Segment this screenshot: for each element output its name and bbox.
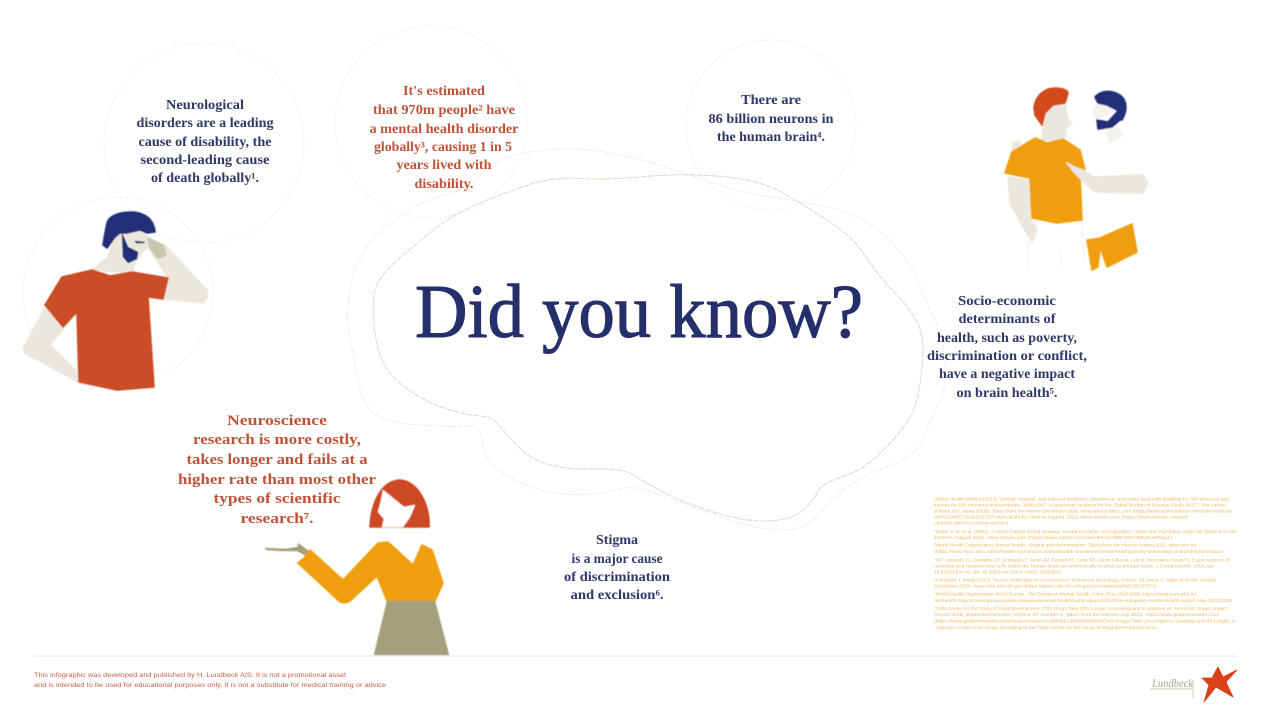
- outer brain contour: [347, 149, 946, 530]
- text: socio-economic determinants: health, such as poverty,: [937, 330, 1077, 345]
- references: ³World Health Organization. Mental health - Stigma and discrimination. Taken from the internet August 2021. www.who.int: [934, 542, 1197, 548]
- references: ⁷Tufts Center for the Study of Drug Development. CNS Drugs Take 20% Longer to Develop and to Approve vs. Non-CNS Drugs: Impact: [934, 606, 1228, 612]
- text: neuroscience research: [178, 413, 376, 527]
- references: ⁴W7. Azevedo FA, Carvalho LR, Grinberg LT, Farfel JM, Ferretti RE, Leite RE, Jacob Filho W, Lent R, Herculano-Houzel S. Equal numbers of: [934, 558, 1230, 564]
- text: neurological disorders: second-leading cause: [140, 152, 270, 167]
- text: stigma: [564, 532, 671, 602]
- woman face: [378, 490, 415, 527]
- footer rule: [34, 656, 1237, 657]
- woman skirt: [374, 601, 449, 655]
- references: ⁶World Health Organization. WHO Europe. The European Mental Health Action Plan 2013-2020. https://www.euro.who.int: [934, 592, 1197, 598]
- references: Report 2018, September/October, Volume 20, number 5. Taken from the internet July 2022. https://www.globenewswire.com: [934, 612, 1219, 618]
- text: neuroscience research: types of scientific: [214, 491, 341, 507]
- references: cles/s41380-021-01094-w#Sec1: [934, 520, 1009, 526]
- text: stigma: and exclusion⁶.: [570, 587, 664, 602]
- references: -Approve-vs-Non-CNS-Drugs-According-to-the-Tufts-Center-for-the-Study-of-Drug-Development.html): [934, 625, 1156, 631]
- shorts: [1087, 224, 1137, 270]
- second man beard: [1097, 112, 1120, 129]
- text: socio-economic determinants: discrimination or conflict,: [927, 348, 1087, 363]
- references: /pii/S0140673618322797?via%3Dihub) Internet August 2021. www.nature.com (https://www.nature.com/arti: [934, 514, 1188, 520]
- text: mental health: disability.: [414, 176, 474, 191]
- first man shirt: [1005, 138, 1085, 223]
- logo star: [1202, 667, 1237, 702]
- text: socio-economic determinants: determinants of: [958, 311, 1056, 326]
- references: 10;513(5):532-41. doi: 10.1002/cne.21974. PMID: 19226510.: [934, 570, 1062, 576]
- text: stigma: Stigma: [596, 532, 638, 547]
- text: mental health: It's estimated: [403, 83, 486, 98]
- text: socio-economic determinants: [927, 293, 1087, 400]
- text: stigma: is a major cause: [572, 551, 662, 566]
- second man face: [1093, 103, 1122, 142]
- references: (https://www.globenewswire.com/news-release/2018/09/11/1569554/0/en/CNS-Drugs-Take-20-Longer-to-Develop-and-38-Longer-to: [934, 618, 1236, 624]
- text: mental health: a mental health disorder: [370, 121, 519, 136]
- text: neurons: There are: [741, 92, 801, 107]
- text: neurological disorders: Neurological: [166, 97, 244, 112]
- references: (https://www.euro.who.int/en/health-topics/noncommunicable-diseases/mental-health/priority-areas/stigma-and-discrimination): [934, 549, 1223, 555]
- text: neurological disorders: [136, 97, 274, 185]
- text: stigma: of discrimination: [564, 569, 671, 584]
- text: socio-economic determinants: on brain health⁵.: [956, 385, 1058, 400]
- second man arm: [1067, 163, 1148, 193]
- text: neurons: [708, 92, 834, 144]
- text: mental health: that 970m people² have: [373, 102, 515, 117]
- woman hand: [265, 543, 311, 556]
- text: mental health: years lived with: [396, 157, 492, 172]
- text: neuroscience research: research is more costly,: [193, 432, 361, 448]
- logo underline: [1150, 680, 1193, 698]
- references: /en/health-topics/noncommunicable-diseases/mental-health/publications/2013/the-european-mental-health-action-plan-20132020: [934, 598, 1232, 604]
- text: mental health: [370, 83, 519, 191]
- disclaimer: This infographic was developed and published by H. Lundbeck A/S. It is not a promotional asset: [34, 672, 346, 679]
- references: Global Health Metrics (2019) "Global, regional, and national incidence, prevalence, and years lived with disability for 354 diseases and: [934, 496, 1229, 502]
- figure: two men: [1005, 88, 1148, 270]
- text: neuroscience research: Neuroscience: [227, 413, 327, 429]
- references: Volume 392, Issue 10159. Taken from the internet December 2020. www.sciencedirect.com (https://www.sciencedirect.com/science/article: [934, 508, 1232, 514]
- references: December 2020. www.ncbi.nlm.nih.gov (https://www.ncbi.nlm.nih.gov/pmc/articles/PMC3812767/): [934, 584, 1156, 590]
- text: neurological disorders: cause of disability, the: [138, 134, 272, 149]
- text: neuroscience research: takes longer and fails at a: [186, 452, 368, 468]
- text: neurons: 86 billion neurons in: [708, 111, 834, 126]
- logo wordmark: Lundbeck: [1151, 678, 1194, 690]
- man shirt: [45, 270, 168, 390]
- disclaimer: [34, 672, 386, 689]
- references: [934, 496, 1237, 631]
- text: socio-economic determinants: have a negative impact: [939, 366, 1076, 381]
- woman hair: [370, 480, 429, 527]
- background circles: [23, 26, 856, 387]
- text: neurons: the human brain⁴.: [717, 129, 825, 144]
- references: internet, August 2021. www.nature.com (https://www.nature.com/articles/s41380-020-00918-w#Sec1): [934, 535, 1172, 541]
- trousers outline: [1028, 222, 1084, 268]
- figure: man with hand on face: [23, 212, 207, 390]
- woman sweater: [298, 542, 443, 603]
- disclaimer: and is intended to be used for educational purposes only. It is not a substitute for medical training or advice: [34, 682, 386, 689]
- man beard and eye: [122, 233, 145, 263]
- man hand: [148, 238, 166, 258]
- second man hair: [1095, 91, 1126, 120]
- first man hair: [1034, 88, 1068, 125]
- text: neuroscience research: higher rate than most other: [178, 472, 376, 488]
- first man skin: face, neck and arm: [1008, 103, 1072, 242]
- references: injuries for 195 countries and territories, 1990-2017: a systematic analysis for the Global Burden of Disease Study 2017." The Lancet,: [934, 502, 1227, 508]
- text: socio-economic determinants: Socio-economic: [958, 293, 1056, 308]
- brain outline: [347, 149, 946, 530]
- references: ²Smith, E.N. et al. (2021). "A Brain Capital Grand Strategy: toward economic reimagination." Molecular Psychiatry, Issue 26. Taken from the: [934, 529, 1237, 535]
- man skin: arms, neck and face: [23, 230, 207, 387]
- text: neuroscience research: research⁷.: [240, 511, 314, 527]
- title: Did you know?: [415, 270, 863, 354]
- text: mental health: globally³, causing 1 in 5: [374, 139, 512, 154]
- text: neurological disorders: disorders are a leading: [136, 115, 274, 130]
- logo: Lundbeck: [1150, 667, 1237, 702]
- references: neuronal and nonneuronal cells make the human brain an isometrically scaled-up primate brain. J Comp Neurol. 2009 Apr: [934, 564, 1214, 570]
- inner brain contour: [373, 175, 923, 521]
- figure: woman pointing: [265, 480, 449, 655]
- references: ⁵Pardham, I. Irving (2013) "Seven challenges in neuroscience" Functional Neurology, Volume 28, Issue 3. Taken from the internet: [934, 578, 1217, 584]
- text: neurological disorders: of death globally¹.: [151, 170, 259, 185]
- man hair: [103, 212, 155, 248]
